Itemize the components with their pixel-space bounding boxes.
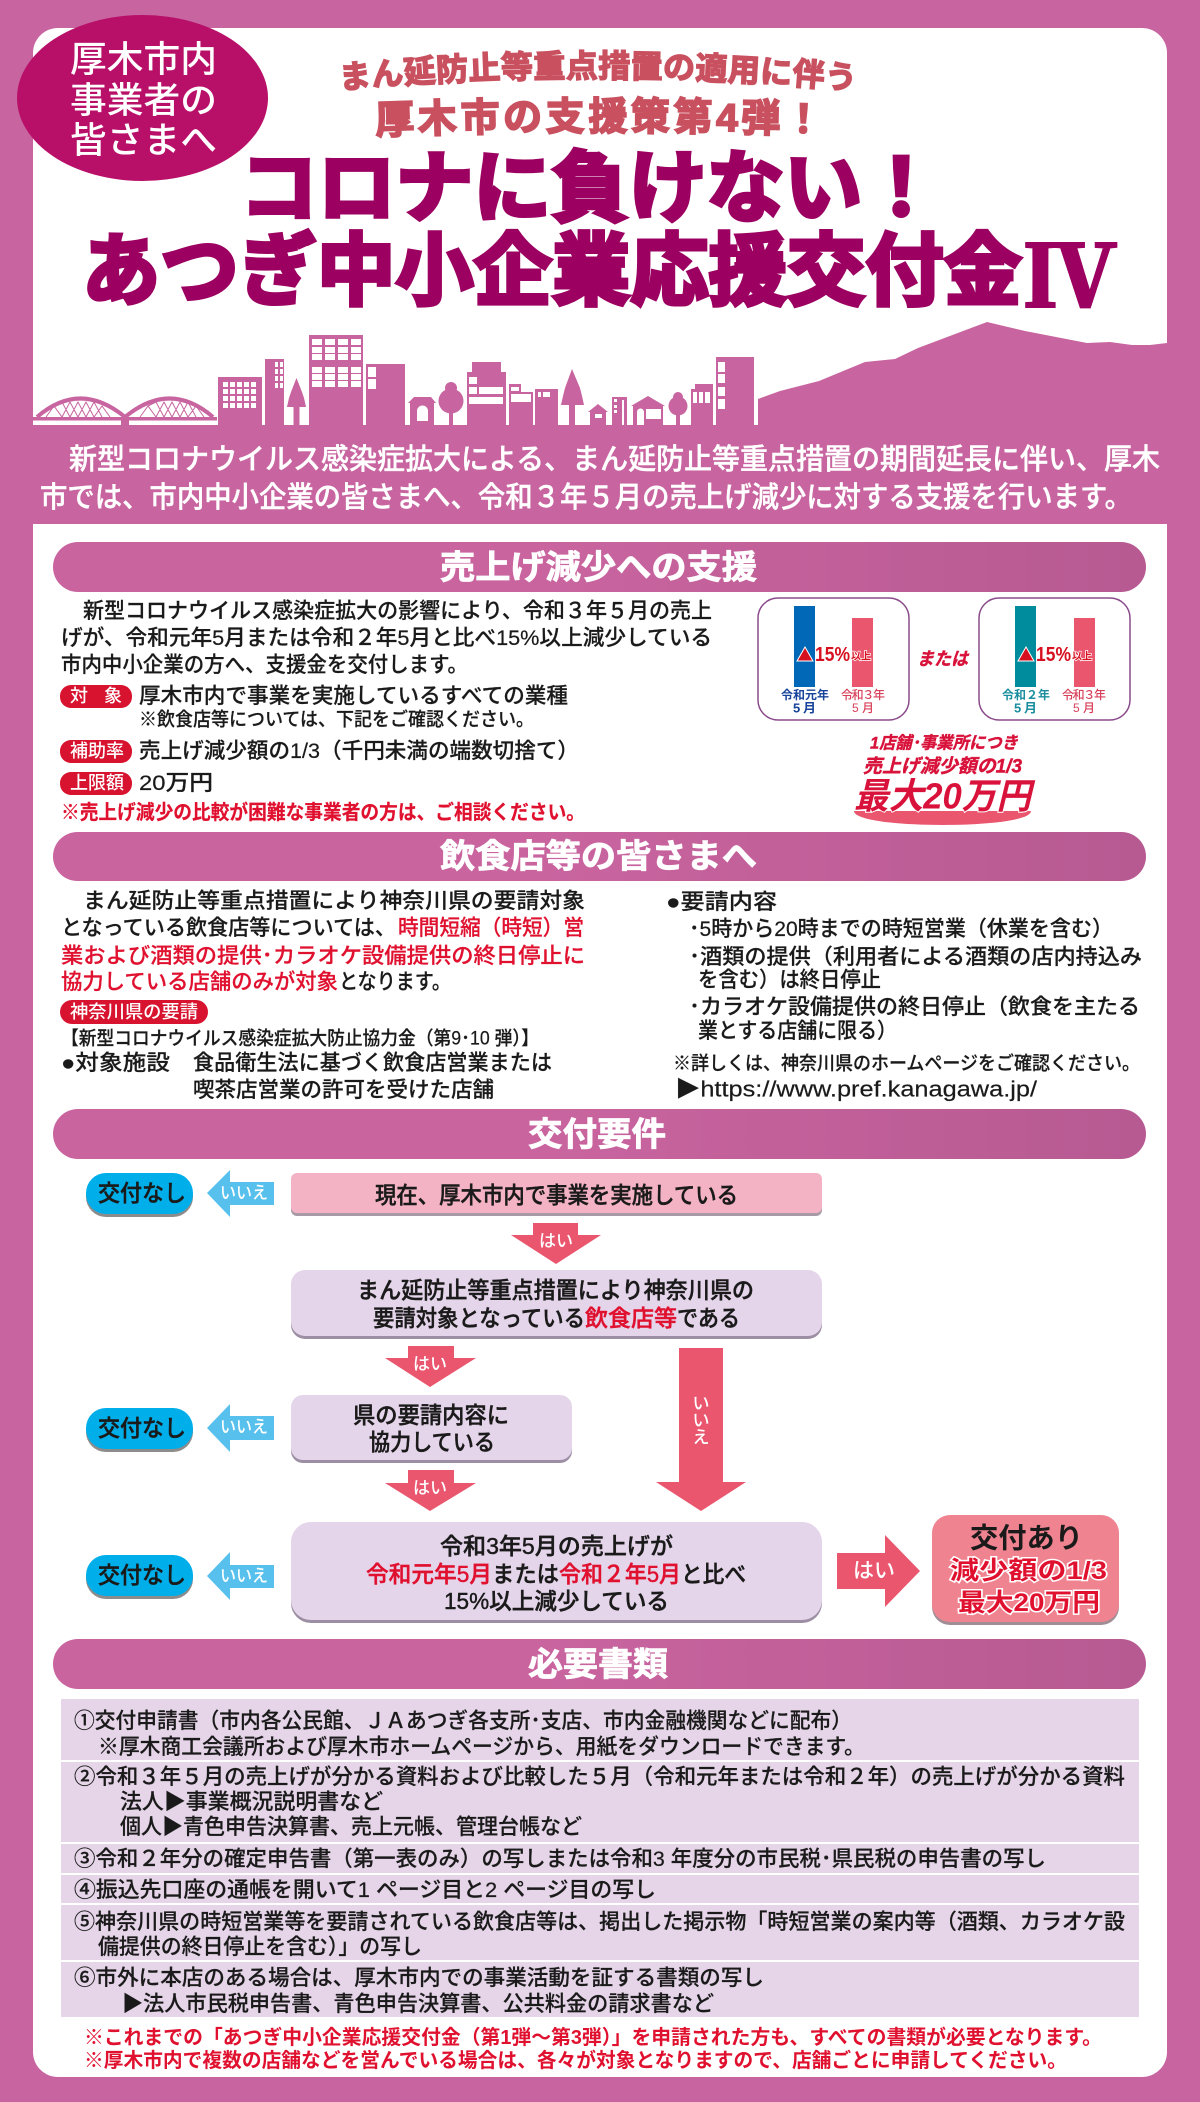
- text block: restaurant conditions: となっている飲食店等については、: [61, 916, 396, 940]
- heading: restaurants: 飲食店等の皆さまへ: [440, 838, 757, 874]
- heading: restaurants: [53, 832, 1146, 881]
- callout: maximum amount: [854, 734, 1036, 825]
- heading: sales decline support: 売上げ減少への支援: [440, 548, 757, 586]
- text block: subsidy rate: 補助率: [70, 741, 124, 761]
- outcome: no grant 3: [86, 1555, 193, 1599]
- title: コロナに負けない！: [240, 144, 940, 232]
- text block: sales decline description: 新型コロナウイルス感染症拡大の影響により、令和３年５月の売上: [83, 598, 712, 623]
- title: [82, 144, 1117, 332]
- text block: restaurant conditions: 協力している店舗のみが対象: [61, 970, 338, 994]
- document item 2: [61, 1762, 1139, 1842]
- outcome: no grant 2: [86, 1408, 193, 1452]
- arrow: no long: い: [692, 1394, 710, 1412]
- box: restaurant target: 飲食店等: [585, 1305, 677, 1331]
- panel: white body: [33, 524, 1167, 2077]
- box: cooperating with request: [291, 1395, 572, 1463]
- subtitle: [343, 49, 852, 139]
- panel: eligibility flow: [53, 1109, 1146, 1625]
- chart: 2019 vs 2021 bars: 5月: [793, 700, 816, 716]
- box: 15 percent decline: 令和3年5月の売上げが: [440, 1533, 673, 1559]
- chart: 2020 vs 2021 bars: 15%: [1036, 644, 1071, 666]
- badge: audience: 事業者の: [70, 80, 217, 120]
- notes: red: ※これまでの「あつぎ中小企業応援交付金（第1弾～第3弾）」を申請された方も、すべての書類が必要となります。: [84, 2025, 1102, 2049]
- text block: restaurant conditions: [61, 889, 585, 994]
- document item 6: ⑥市外に本店のある場合は、厚木市内での事業活動を証する書類の写し: [74, 1966, 764, 1990]
- arrow: yes 2: はい: [413, 1354, 447, 1374]
- document item 2: 個人▶青色申告決算書、売上元帳、管理台帳など: [120, 1815, 582, 1839]
- outcome: grant: [932, 1515, 1119, 1625]
- document item 4: ④振込先口座の通帳を開いて1 ページ目と2 ページ目の写し: [74, 1878, 656, 1902]
- text block: upper limit: [60, 771, 213, 795]
- box: cooperating with request: 協力している: [369, 1429, 495, 1455]
- box: cooperating with request: 県の要請内容に: [353, 1402, 509, 1428]
- notes: red: [84, 2025, 1102, 2072]
- note: consult: ※売上げ減少の比較が困難な事業者の方は、ご相談ください。: [61, 800, 585, 824]
- chart: 2020 vs 2021 bars: 令和２年: [1002, 687, 1050, 702]
- box: 15 percent decline: と比べ: [681, 1561, 746, 1587]
- document item 5: [61, 1905, 1139, 1960]
- text block: eligibility: [60, 684, 568, 730]
- text block: eligibility: 対 象: [70, 686, 122, 706]
- text block: request details: ●要請内容: [666, 890, 777, 914]
- icon: right buildings and houses: [408, 357, 754, 425]
- title: Ⅳ: [1025, 210, 1117, 332]
- box: 15 percent decline: [291, 1522, 822, 1623]
- arrow: no long: [656, 1348, 746, 1511]
- intro text: [40, 443, 1160, 514]
- icon: arch bridges: [33, 398, 217, 427]
- document item 3: ③令和２年分の確定申告書（第一表のみ）の写しまたは令和3 年度分の市民税･県民税の申告書の写し: [74, 1847, 1046, 1871]
- badge: audience: [17, 15, 268, 181]
- text block: request details: [666, 890, 1142, 1102]
- heading: required documents: [53, 1639, 1146, 1689]
- arrow: no long: い: [692, 1410, 710, 1430]
- document item 2: ②令和３年５月の売上げが分かる資料および比較した５月（令和元年または令和２年）の売上げが分かる資料: [74, 1765, 1125, 1789]
- panel: sales decline support: [53, 542, 1146, 825]
- text block: request details: ※詳しくは、神奈川県のホームページをご確認ください。: [673, 1052, 1140, 1074]
- subtitle: 厚木市の支援策第4弾！: [375, 96, 808, 139]
- chart: 2020 vs 2021 bars: 5月: [1014, 700, 1037, 716]
- document item 2: 法人▶事業概況説明書など: [120, 1790, 383, 1814]
- intro text: 新型コロナウイルス感染症拡大による、まん延防止等重点措置の期間延長に伴い、厚木: [69, 443, 1160, 476]
- skyline illustration: [33, 322, 1167, 427]
- text block: restaurant conditions: となります。: [339, 970, 451, 994]
- text block: restaurant conditions: 時間短縮（時短）営: [398, 916, 584, 940]
- arrow: no 2: [207, 1404, 274, 1452]
- badge: audience: 皆さまへ: [70, 120, 217, 160]
- arrow: yes 3: はい: [413, 1478, 447, 1498]
- chart: 2020 vs 2021 bars: 令和３年: [1062, 687, 1106, 702]
- box: 15 percent decline: 令和２年5月: [559, 1561, 681, 1587]
- heading: sales decline support: [53, 542, 1146, 592]
- chart: 2019 vs 2021 bars: 令和元年: [781, 687, 829, 702]
- text block: request details: ･酒類の提供（利用者による酒類の店内持込み: [689, 945, 1142, 969]
- heading: required documents: 必要書類: [528, 1646, 668, 1682]
- text block: target facilities: 【新型コロナウイルス感染症拡大防止協力金（第9･10 弾）】: [61, 1028, 539, 1050]
- chart: 2019 vs 2021 bars: [758, 598, 909, 720]
- chart: 2019 vs 2021 bars: 令和３年: [841, 687, 885, 702]
- chart: 2019 vs 2021 bars: 以上: [851, 650, 871, 662]
- text block: sales decline description: げが、令和元年5月または令和２年5月と比べ15%以上減少している: [61, 626, 712, 650]
- text block: restaurant conditions: 業および酒類の提供･カラオケ設備提供の終日停止に: [61, 944, 585, 968]
- callout: maximum amount: 1店舗･事業所につき: [870, 734, 1018, 752]
- chart: 2020 vs 2021 bars: [979, 598, 1130, 720]
- arrow: no 1: いいえ: [220, 1184, 268, 1202]
- intro text: 市では、市内中小企業の皆さまへ、令和３年５月の売上げ減少に対する支援を行います。: [40, 481, 1132, 514]
- box: doing business in Atsugi: 現在、厚木市内で事業を実施している: [375, 1182, 738, 1208]
- badge: audience: 厚木市内: [70, 38, 217, 80]
- text block: upper limit: 上限額: [70, 773, 124, 793]
- document item 1: [61, 1699, 1139, 1760]
- text block: request details: ･5時から20時までの時短営業（休業を含む）: [689, 917, 1113, 941]
- callout: maximum amount: 最大20万円: [854, 776, 1036, 816]
- notes: red: ※厚木市内で複数の店舗などを営んでいる場合は、各々が対象となりますので、店舗ごとに申請してください。: [84, 2048, 1067, 2072]
- box: restaurant target: である: [677, 1305, 740, 1331]
- text block: request details: ･カラオケ設備提供の終日停止（飲食を主たる: [689, 995, 1140, 1019]
- text block: request details: 業とする店舗に限る）: [698, 1019, 897, 1043]
- arrow: no 1: [207, 1170, 274, 1217]
- heading: eligibility: [53, 1109, 1146, 1159]
- box: 15 percent decline: または: [492, 1561, 559, 1587]
- arrow: yes 3: [385, 1470, 476, 1511]
- document item 1: ※厚木商工会議所および厚木市ホームページから、用紙をダウンロードできます。: [98, 1735, 865, 1759]
- chart: 2019 vs 2021 bars: 15%: [815, 644, 850, 666]
- text block: sales decline description: 市内中小企業の方へ、支援金を交付します。: [61, 653, 468, 677]
- panel: required documents: [53, 1639, 1146, 2072]
- box: restaurant target: [291, 1270, 822, 1339]
- text block: subsidy rate: 売上げ減少額の1/3（千円未満の端数切捨て）: [139, 739, 579, 763]
- panel: restaurants: [53, 832, 1146, 1102]
- arrow: yes to grant: [837, 1535, 920, 1607]
- panel: header: [17, 15, 1167, 425]
- arrow: no 2: いいえ: [220, 1418, 268, 1436]
- box: 15 percent decline: 15%以上減少している: [444, 1588, 669, 1614]
- arrow: yes 1: [511, 1223, 601, 1264]
- outcome: grant: 減少額の1/3: [950, 1557, 1107, 1585]
- text block: request details: を含む）は終日停止: [698, 968, 881, 992]
- text block: eligibility: 厚木市内で事業を実施しているすべての業種: [139, 684, 568, 708]
- text block: target facilities: [61, 1028, 552, 1102]
- outcome: no grant 3: 交付なし: [98, 1562, 186, 1588]
- document item 5: 備提供の終日停止を含む）」の写し: [98, 1935, 422, 1959]
- arrow: no long: え: [692, 1428, 710, 1446]
- box: 15 percent decline: 令和元年5月: [366, 1561, 492, 1587]
- label: or: または: [917, 649, 970, 669]
- outcome: no grant 2: 交付なし: [98, 1415, 186, 1441]
- document item 5: ⑤神奈川県の時短営業等を要請されている飲食店等は、掲出した掲示物「時短営業の案内等（酒類、カラオケ設: [74, 1910, 1125, 1934]
- box: restaurant target: まん延防止等重点措置により神奈川県の: [357, 1277, 754, 1303]
- text block: target facilities: 喫茶店営業の許可を受けた店舗: [193, 1078, 494, 1102]
- box: restaurant target: 要請対象となっている: [373, 1305, 585, 1331]
- chart: 2019 vs 2021 bars: 5月: [852, 701, 874, 715]
- arrow: no 3: [207, 1552, 274, 1600]
- document item 6: [61, 1962, 1139, 2017]
- title: あつぎ中小企業応援交付金: [82, 226, 1022, 316]
- box: doing business in Atsugi: [291, 1173, 822, 1216]
- document item 4: [61, 1875, 1139, 1903]
- chart: 2020 vs 2021 bars: 以上: [1072, 650, 1092, 662]
- text block: request details: ▶https://www.pref.kanagawa.jp/: [675, 1076, 1038, 1102]
- text block: target facilities: 食品衛生法に基づく飲食店営業または: [193, 1051, 552, 1075]
- text block: sales decline description: [61, 598, 712, 677]
- heading: eligibility: 交付要件: [528, 1116, 666, 1152]
- text block: target facilities: ●対象施設: [61, 1051, 170, 1075]
- subtitle: まん延防止等重点措置の適用に伴う: [343, 49, 852, 91]
- outcome: no grant 1: [86, 1173, 193, 1217]
- document item 6: ▶法人市民税申告書、青色申告決算書、公共料金の請求書など: [122, 1992, 714, 2016]
- callout: maximum amount: 売上げ減少額の1/3: [863, 756, 1022, 778]
- text block: eligibility: ※飲食店等については、下記をご確認ください。: [139, 708, 534, 730]
- arrow: yes 1: はい: [539, 1232, 573, 1250]
- text block: restaurant conditions: まん延防止等重点措置により神奈川県の要請対象: [83, 889, 585, 913]
- arrow: no 3: いいえ: [220, 1566, 268, 1586]
- arrow: yes to grant: はい: [853, 1560, 895, 1582]
- chart: 2020 vs 2021 bars: 5月: [1073, 701, 1095, 715]
- outcome: grant: 最大20万円: [958, 1589, 1100, 1617]
- document item 1: ①交付申請書（市内各公民館、ＪＡあつぎ各支所･支店、市内金融機関などに配布）: [74, 1709, 852, 1733]
- badge: Kanagawa request: 神奈川県の要請: [70, 1002, 198, 1022]
- arrow: yes 2: [385, 1346, 476, 1387]
- outcome: no grant 1: 交付なし: [98, 1180, 186, 1206]
- icon: left buildings: [218, 335, 405, 425]
- outcome: grant: 交付あり: [970, 1522, 1083, 1554]
- text block: upper limit: 20万円: [139, 771, 213, 795]
